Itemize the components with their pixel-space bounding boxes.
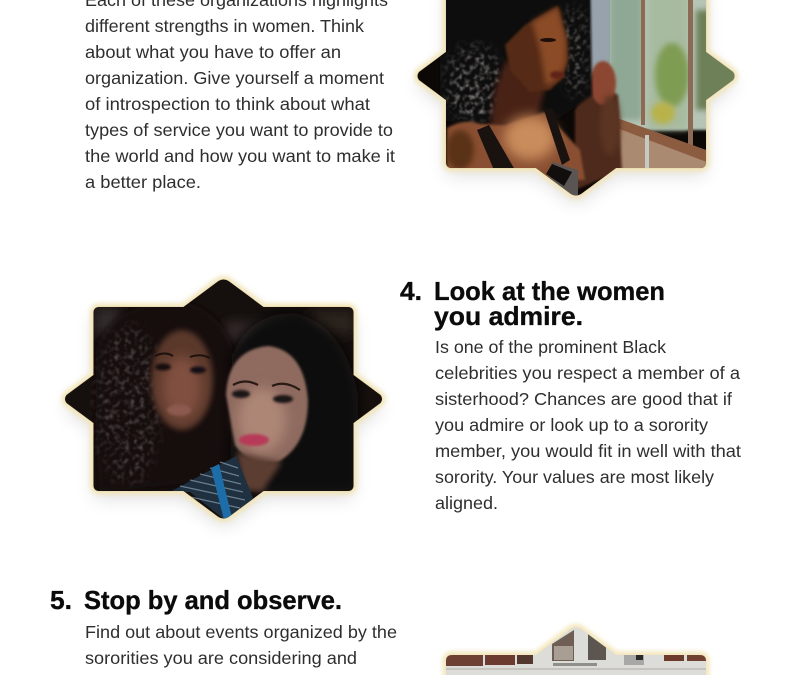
hair texture: [446, 47, 502, 123]
striped shirt: [170, 456, 254, 520]
right face: [226, 346, 308, 463]
heading: step 5: 5.: [50, 585, 72, 615]
neck: [490, 60, 545, 128]
text block: step 3 body: [85, 0, 395, 192]
photo: building in star frame: [446, 626, 706, 675]
neck: [236, 452, 282, 492]
text block: step 5 body: Find out about events organized by the: [85, 622, 397, 642]
text block: step 5 body: [85, 622, 397, 668]
heading: step 4: you admire.: [434, 301, 583, 331]
heading: step 4: [400, 276, 665, 331]
arm and hand: [575, 80, 622, 190]
heading: step 5: Stop by and observe.: [84, 585, 342, 615]
text block: step 4 body: [435, 337, 741, 513]
text block: step 4 body: you admire or look up to a sorority: [435, 415, 708, 435]
heading: step 4: 4.: [400, 276, 422, 306]
text block: step 3 body: about what you have to offer an: [85, 42, 341, 62]
chest and shoulder: [447, 112, 585, 180]
photo: two women in star frame: [60, 270, 390, 526]
window glass: [590, 0, 740, 130]
text block: step 3 body: organization. Give yourself a moment: [85, 68, 384, 88]
text block: step 3 body: the world and how you want to make it: [85, 146, 395, 166]
heading: step 4: Look at the women: [434, 276, 665, 306]
hair: [440, 0, 594, 108]
text block: step 4 body: celebrities you respect a member of a: [435, 363, 740, 383]
face: [505, 6, 568, 92]
left face: [151, 330, 213, 430]
text block: step 3 body: different strengths in women. Think: [85, 16, 364, 36]
text block: step 3 body: of introspection to think about what: [85, 94, 370, 114]
text block: step 5 body: sororities you are considering and: [85, 648, 357, 668]
text block: step 4 body: aligned.: [435, 493, 498, 513]
hair texture: [96, 325, 160, 485]
text block: step 4 body: member, you would fit in well with that: [435, 441, 741, 461]
text block: step 4 body: sorority. Your values are most likely: [435, 467, 714, 487]
photo: woman at a window in star frame: [410, 0, 750, 210]
text block: step 3 body: types of service you want to provide to: [85, 120, 393, 140]
window sill and wall below: [618, 130, 706, 168]
text block: step 4 body: Is one of the prominent Black: [435, 337, 666, 357]
straps: [477, 125, 515, 170]
left woman's hair: [96, 300, 240, 492]
text block: step 4 body: sisterhood? Chances are good that if: [435, 389, 732, 409]
text block: step 3 body: a better place.: [85, 172, 201, 192]
right woman's hair: [230, 313, 358, 492]
